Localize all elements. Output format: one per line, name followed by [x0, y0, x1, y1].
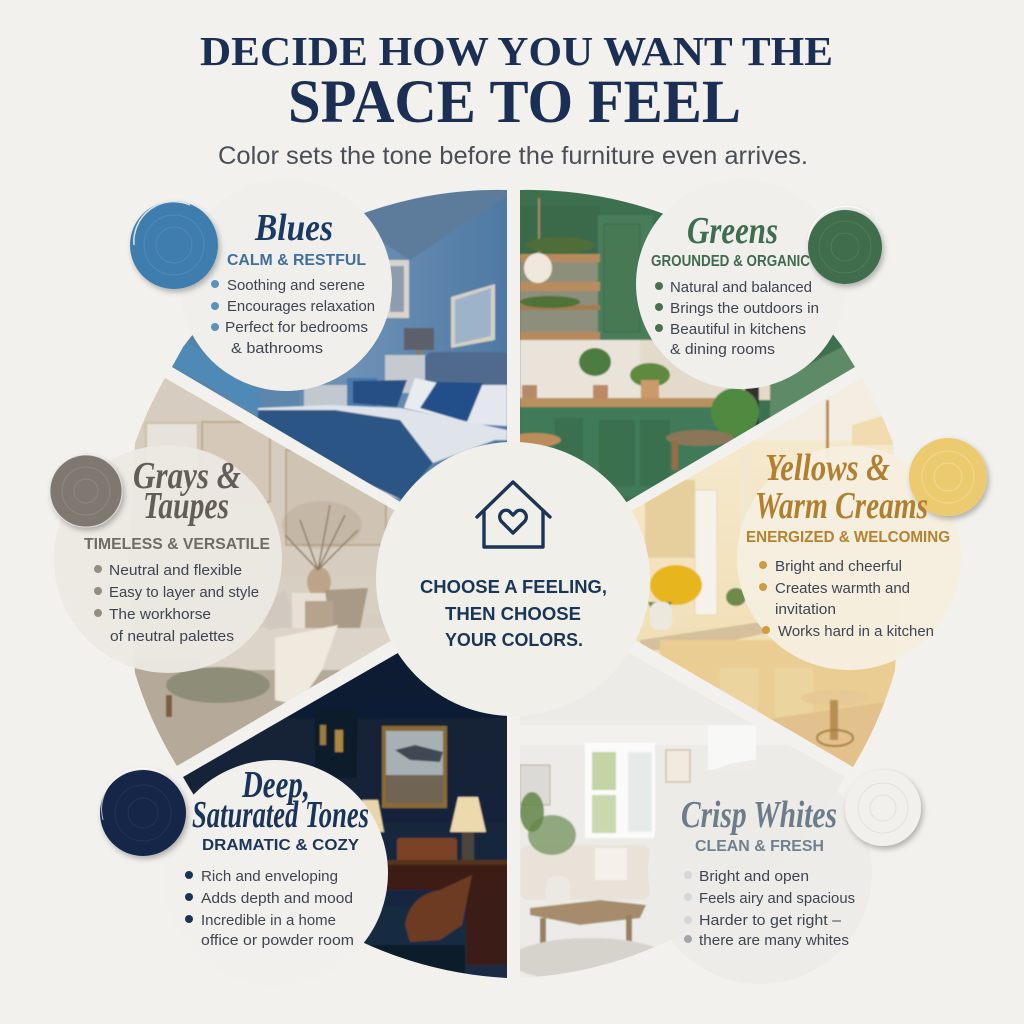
- bullet list: yellows: [759, 559, 934, 640]
- tagline: blues: CALM & RESTFUL: [227, 252, 366, 269]
- tagline: deep tones: DRAMATIC & COZY: [202, 837, 359, 854]
- heading: yellows: Yellows &: [765, 447, 890, 489]
- hub message: [420, 577, 607, 650]
- bullet list: grays: Easy to layer and style: [109, 585, 259, 601]
- bullet list: greens: & dining rooms: [670, 342, 775, 358]
- swatch: yellow paint: [909, 438, 987, 516]
- heading: deep tones: Deep,: [241, 764, 310, 806]
- bullet list: whites: Harder to get right –: [699, 913, 842, 929]
- bullet list: greens: Natural and balanced: [670, 280, 812, 296]
- bullet list: whites: [684, 869, 855, 949]
- bullet list: blues: & bathrooms: [231, 341, 323, 357]
- bullet list: deep tones: office or powder room: [201, 933, 354, 949]
- bullet list: grays: of neutral palettes: [110, 629, 234, 645]
- bullet list: deep tones: [185, 869, 354, 949]
- bullet list: whites: Bright and open: [699, 869, 809, 885]
- bullet list: whites: there are many whites: [699, 933, 849, 949]
- panel: grays and taupes: [48, 378, 394, 766]
- hub message: CHOOSE A FEELING,: [420, 577, 607, 597]
- bullet list: yellows: Works hard in a kitchen: [778, 624, 934, 640]
- heading: greens: Greens: [687, 210, 778, 252]
- panel: blues: [130, 179, 510, 520]
- text card: grays: [54, 445, 282, 673]
- photo: green kitchen: [509, 185, 860, 515]
- bullet list: grays: [94, 563, 259, 645]
- tagline: grays: TIMELESS & VERSATILE: [84, 536, 270, 553]
- bullet list: whites: Feels airy and spacious: [699, 891, 855, 907]
- heading: grays: Grays &: [133, 455, 241, 497]
- title: DECIDE HOW YOU WANT THE: [200, 28, 833, 74]
- bullet list: grays: Neutral and flexible: [109, 563, 242, 579]
- swatch: navy paint: [100, 768, 186, 856]
- text card: blues: [180, 179, 392, 391]
- bullet list: yellows: invitation: [775, 602, 836, 618]
- bullet list: grays: The workhorse: [109, 607, 211, 623]
- bullet list: blues: [211, 278, 375, 357]
- tagline: greens: GROUNDED & ORGANIC: [651, 253, 810, 270]
- tagline: yellows: ENERGIZED & WELCOMING: [746, 529, 950, 546]
- hub message: YOUR COLORS.: [445, 630, 583, 650]
- text card: whites: [648, 760, 872, 984]
- photo: white living room: [520, 726, 755, 977]
- heading: grays: Taupes: [143, 485, 229, 527]
- tagline: whites: CLEAN & FRESH: [695, 838, 824, 855]
- photo: cream kitchen: [632, 378, 896, 767]
- bullet list: greens: Beautiful in kitchens: [670, 322, 806, 338]
- hub message: THEN CHOOSE: [445, 604, 581, 624]
- swatch: green paint: [808, 206, 882, 284]
- photo: navy home office: [183, 653, 507, 978]
- panel: crisp whites: [520, 726, 926, 977]
- bullet list: deep tones: Adds depth and mood: [201, 891, 353, 907]
- text card: yellows: [737, 446, 961, 670]
- swatch: blue paint: [130, 201, 218, 289]
- panel: yellows and warm creams: [632, 378, 992, 767]
- bullet list: blues: Soothing and serene: [227, 278, 365, 294]
- heading: blues: Blues: [254, 207, 333, 249]
- title: SPACE TO FEEL: [288, 69, 741, 136]
- bullet list: deep tones: Rich and enveloping: [201, 869, 338, 885]
- bullet list: greens: Brings the outdoors in: [670, 301, 819, 317]
- swatch: white paint: [845, 770, 921, 846]
- subtitle: Color sets the tone before the furniture even arrives.: [218, 142, 808, 170]
- panel: deep saturated tones: [100, 650, 510, 986]
- bullet list: yellows: Bright and cheerful: [775, 559, 902, 575]
- title: [200, 28, 833, 136]
- heading: whites: Crisp Whites: [681, 794, 837, 836]
- heading: yellows: [755, 447, 928, 527]
- bullet list: blues: Encourages relaxation: [227, 299, 375, 315]
- heading: grays: [133, 455, 241, 527]
- heading: yellows: Warm Creams: [755, 485, 928, 527]
- bullet list: blues: Perfect for bedrooms: [225, 320, 368, 336]
- center hub: [376, 442, 650, 716]
- heading: deep tones: [192, 764, 369, 836]
- photo: neutral living room: [134, 378, 394, 766]
- bullet list: deep tones: Incredible in a home: [201, 913, 336, 929]
- heading: deep tones: Saturated Tones: [192, 794, 369, 836]
- icon: house with heart: [477, 482, 550, 547]
- swatch: taupe paint: [50, 455, 122, 527]
- bullet list: yellows: Creates warmth and: [775, 581, 910, 597]
- text card: greens: [636, 179, 846, 389]
- text card: deep tones: [162, 760, 388, 986]
- panel: greens: [509, 179, 882, 515]
- bullet list: greens: [655, 280, 819, 358]
- photo: blue bedroom: [172, 190, 507, 502]
